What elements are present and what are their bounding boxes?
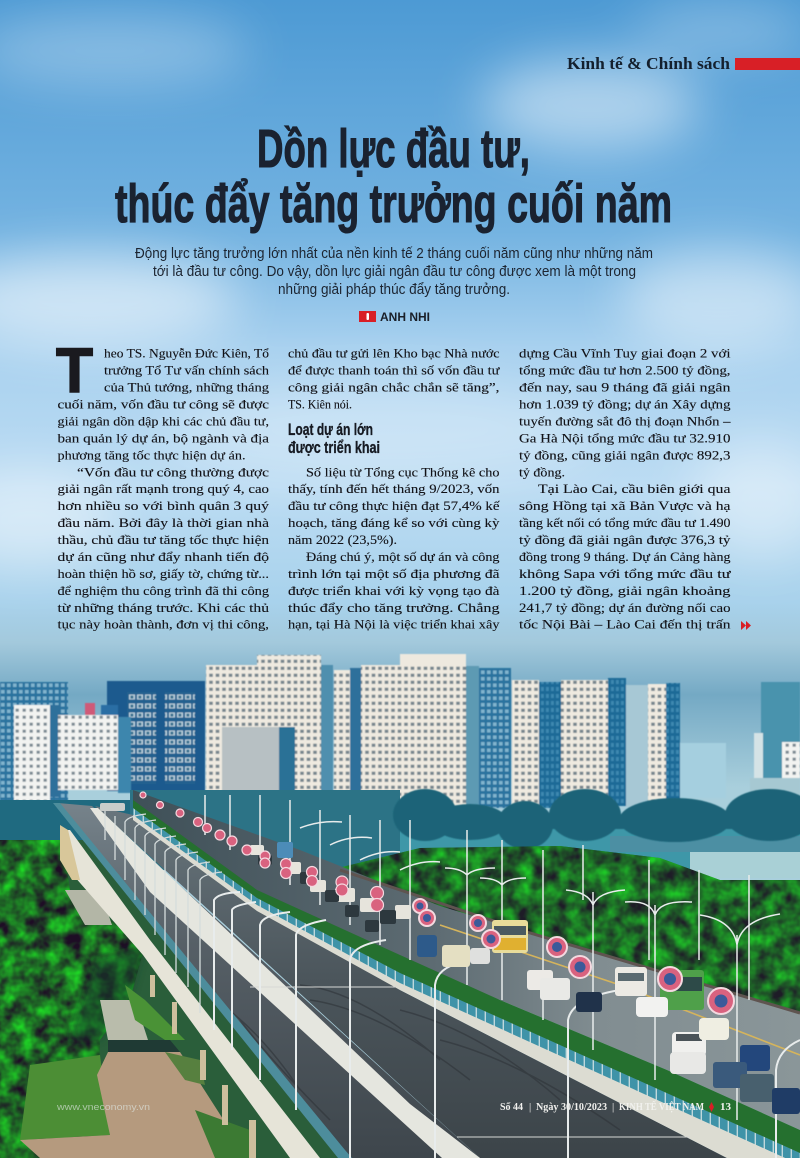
grey office block xyxy=(222,727,295,802)
bridge piers xyxy=(150,975,256,1158)
photo: decorative lamp signs xyxy=(140,792,734,1014)
article column 3: 241,7 tỷ đồng; dự án đường nối cao xyxy=(519,600,730,615)
article column 3: sông Hồng tại xã Bản Vược và hạ xyxy=(519,498,731,513)
far pale tower xyxy=(680,743,726,798)
right glass tower xyxy=(750,682,800,800)
article column 2: thúc đẩy cho tăng trưởng. Chẳng xyxy=(288,600,500,615)
page footer: | xyxy=(529,1101,531,1113)
road markings xyxy=(250,987,690,1137)
standfirst: tới là đầu tư công. Do vậy, dồn lực giải ngân đầu tư công được xem là một trong xyxy=(153,263,636,280)
page footer: KINH TẾ VIỆT NAM xyxy=(619,1100,704,1113)
far guard fence xyxy=(340,870,800,1013)
page footer: | xyxy=(612,1101,614,1113)
page footer: 13 xyxy=(720,1101,732,1113)
drop cap: T xyxy=(56,336,93,406)
median planting xyxy=(133,800,800,1155)
teal fence xyxy=(133,808,800,1158)
article column 1: của Thủ tướng, những tháng xyxy=(104,380,270,395)
article column 2: Đáng chú ý, một số dự án và công xyxy=(306,549,500,564)
article column 1: giải ngân rất mạnh trong quý 4, cao xyxy=(58,481,269,496)
article column 1: cuối năm, vốn đầu tư công sẽ được xyxy=(58,396,269,412)
article column 2: TS. Kiên nói. xyxy=(288,396,352,412)
article column 1 xyxy=(56,336,270,632)
article column 1: heo TS. Nguyễn Đức Kiên, Tổ xyxy=(104,346,269,361)
photo: vehicles xyxy=(100,803,800,1114)
article column 3: tuyến đường sắt đô thị đoạn Nhổn – xyxy=(519,414,731,428)
right tower cluster xyxy=(512,678,680,808)
article column 3: dựng Cầu Vĩnh Tuy giai đoạn 2 với xyxy=(519,346,731,361)
page footer: Ngày 30/10/2023 xyxy=(536,1101,607,1113)
article column 1: dự án cũng như đẩy nhanh tiến độ xyxy=(58,549,269,564)
article column 1: thầu, chủ đầu tư tăng tốc thực hiện xyxy=(58,532,270,547)
standfirst xyxy=(135,245,653,298)
photo: river and distant trees xyxy=(0,789,800,878)
photo: street lamps xyxy=(105,795,800,1158)
article column 1: đầu năm. Bởi đây là thời gian nhà xyxy=(58,515,269,530)
article column 2: để được thanh toán thì số vốn đầu tư xyxy=(288,363,501,378)
median white wall xyxy=(90,808,480,1158)
article column 1: giải ngân dồn dập khi các chủ đầu tư, xyxy=(58,414,269,428)
article column 2: công giải ngân chắc chắn sẽ tăng”, xyxy=(288,380,500,395)
standfirst: những giải pháp thúc đẩy tăng trưởng. xyxy=(278,281,510,298)
article column 3: tỷ đồng đã giải ngân được 376,3 tỷ xyxy=(519,532,731,547)
photo: viaduct deck and roads xyxy=(53,790,800,1158)
article column 3: tốc Nội Bài – Lào Cai đến thị trấn xyxy=(519,617,731,632)
article column 3: hơn 1.039 tỷ đồng; dự án Xây dựng xyxy=(519,396,731,412)
article column 2: trình lớn tại một số địa phương đã xyxy=(288,566,500,581)
article column 3: 1.200 tỷ đồng, giải ngân khoảng xyxy=(519,583,731,598)
traffic road xyxy=(133,790,800,1130)
article column 2: Số liệu từ Tổng cục Thống kê cho xyxy=(306,464,500,479)
article column 1: “Vốn đầu tư công thường được xyxy=(77,464,269,479)
article column 1: để nghiệm thu công trình đã thi công xyxy=(58,583,270,598)
white barrier right xyxy=(133,815,785,1158)
outer fence and side beam xyxy=(53,803,352,1158)
article column 3: Ga Hà Nội tổng mức đầu tư 32.910 xyxy=(519,430,730,445)
article column 3: Tại Lào Cai, cầu biên giới qua xyxy=(538,481,731,496)
title xyxy=(115,119,672,234)
article column 1: trưởng Tổ Tư vấn chính sách xyxy=(104,363,270,378)
article column 3: tổng mức đầu tư hơn 2.500 tỷ đồng, xyxy=(519,363,730,378)
subheading: được triển khai xyxy=(288,438,380,457)
article column 2: hạn, tại Hà Nội là việc triển khai xây xyxy=(288,617,500,632)
article column 1: hoàn thiện hồ sơ, giấy tờ, chứng từ... xyxy=(58,566,269,581)
tyre marks xyxy=(215,985,620,1130)
standfirst: Động lực tăng trưởng lớn nhất của nền kinh tế 2 tháng cuối năm cũng như những năm xyxy=(135,245,653,262)
photo: green hillside beyond the road xyxy=(330,846,800,1013)
article column 1: phương tăng tốc thực hiện dự án. xyxy=(58,447,246,462)
article column 1: tục này hoàn thành, đơn vị thi công, xyxy=(58,617,269,632)
photo: city skyline xyxy=(0,654,800,808)
article column 2: được triển khai với kỳ vọng tạo đà xyxy=(288,583,500,598)
article column 1: ban quản lý dự án, bộ ngành và địa xyxy=(58,430,269,445)
road centre line xyxy=(440,925,800,1055)
central cream towers xyxy=(206,654,511,808)
article column 2: đầu tư công thực hiện đạt 57,4% kế xyxy=(288,498,501,513)
article column 2 xyxy=(288,346,501,632)
article column 3: đồng trong 9 tháng. Dự án Cảng hàng xyxy=(519,549,731,564)
article column 3: không Sapa với tổng mức đầu tư xyxy=(519,566,732,581)
second road xyxy=(95,806,727,1158)
page footer: Số 44 xyxy=(500,1101,523,1113)
article column 3: đến nay, sau 9 tháng đã giải ngân xyxy=(519,380,731,395)
byline xyxy=(359,311,430,324)
article column 3: tỷ đồng, cũng giải ngân được 892,3 xyxy=(519,447,730,462)
section label xyxy=(567,54,800,73)
article column 3 xyxy=(519,346,732,632)
article column 1: hơn nhiều so với bình quân 3 quý xyxy=(58,498,270,513)
article column 3: tầng kết nối có tổng mức đầu tư 1.490 xyxy=(519,515,730,530)
article column 2: chủ đầu tư gửi lên Kho bạc Nhà nước xyxy=(288,346,500,361)
byline: ANH NHI xyxy=(380,312,430,324)
section label: Kinh tế & Chính sách xyxy=(567,54,731,73)
article column 1: từ những tháng trước. Khi các thủ xyxy=(58,600,270,615)
article column 3: tỷ đồng. xyxy=(519,464,565,479)
subheading: Loạt dự án lớn xyxy=(288,420,373,439)
title: Dồn lực đầu tư, xyxy=(257,119,530,179)
website watermark: www.vneconomy.vn xyxy=(56,1102,150,1112)
white towers left xyxy=(14,705,131,801)
article column 2: thấy, tính đến hết tháng 9/2023, vốn xyxy=(288,481,500,496)
article column 2: hoạch, tăng đáng kể so với cùng kỳ xyxy=(288,515,500,530)
page footer xyxy=(500,1100,732,1113)
article column 2: năm 2022 (23,5%). xyxy=(288,532,397,547)
first road xyxy=(58,803,480,1158)
icon: continue arrow xyxy=(741,621,751,630)
subheading xyxy=(288,420,380,457)
left blue block xyxy=(0,682,68,802)
MB dark tower xyxy=(85,681,205,791)
photo: left trees, path and ground xyxy=(0,840,340,1158)
